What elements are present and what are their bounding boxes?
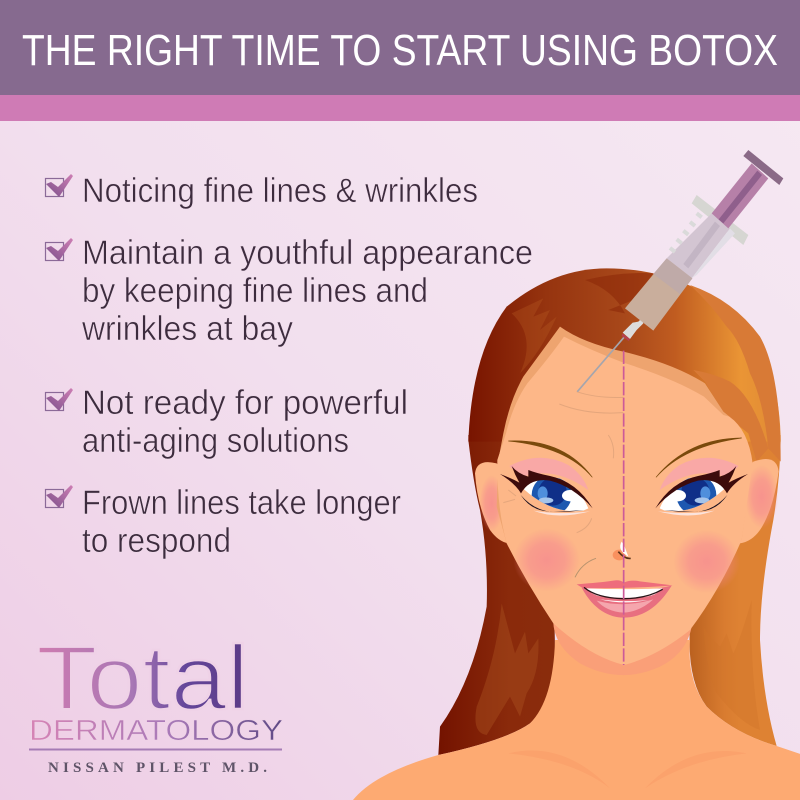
needle xyxy=(577,337,624,392)
item 3: not ready for anti-aging xyxy=(46,384,408,460)
illustration: woman's face xyxy=(352,435,800,800)
left eyebrow xyxy=(508,441,592,477)
right hair fringe band xyxy=(693,370,768,462)
item 3: not ready for anti-aging: anti-aging solutions xyxy=(82,422,349,460)
item 2: youthful appearance: Maintain a youthful appearance xyxy=(82,234,533,272)
right lower hair xyxy=(690,435,781,746)
lips xyxy=(577,580,673,618)
item 3: not ready for anti-aging: Not ready for powerful xyxy=(82,384,408,422)
logo: Total Dermatology: NISSAN PILEST M.D. xyxy=(48,760,267,776)
item 2: youthful appearance: by keeping fine lines and xyxy=(82,272,428,310)
cheek blush xyxy=(513,528,580,592)
header accent band xyxy=(0,95,800,121)
right ear xyxy=(740,459,779,543)
item 4: frown lines: Frown lines take longer xyxy=(82,484,401,522)
neck and shoulders xyxy=(352,640,800,800)
face xyxy=(497,337,753,665)
plunger cap xyxy=(743,150,783,185)
plunger rod xyxy=(712,163,768,228)
syringe liquid xyxy=(625,258,692,331)
left lower hair xyxy=(438,435,555,755)
logo: Total Dermatology xyxy=(29,628,283,776)
right hair outer band xyxy=(690,285,781,462)
collarbones xyxy=(508,750,747,788)
item 1: fine lines: Noticing fine lines & wrinkles xyxy=(82,172,478,210)
hair strands xyxy=(585,273,653,313)
header banner xyxy=(0,0,800,95)
logo: Total Dermatology: Total xyxy=(36,628,249,729)
syringe xyxy=(577,150,783,392)
item 2: youthful appearance xyxy=(46,234,533,348)
checklist xyxy=(46,172,533,560)
midline dashed guide xyxy=(621,351,626,665)
item 4: frown lines: to respond xyxy=(82,522,231,560)
barrel ticks xyxy=(670,213,702,252)
right eyebrow xyxy=(656,438,742,477)
nose xyxy=(613,542,631,560)
top hair xyxy=(468,268,781,442)
right eye xyxy=(655,458,748,516)
finger flange xyxy=(692,195,748,245)
left ear xyxy=(475,462,508,543)
face hairline shade xyxy=(497,327,752,573)
chin shadow xyxy=(553,623,692,675)
left eye xyxy=(500,458,593,516)
item 2: youthful appearance: wrinkles at bay xyxy=(81,310,293,348)
needle hub xyxy=(623,318,643,339)
item 4: frown lines xyxy=(46,484,401,560)
barrel xyxy=(667,213,730,278)
logo: Total Dermatology: DERMATOLOGY xyxy=(29,715,283,747)
wrinkles xyxy=(503,392,623,577)
